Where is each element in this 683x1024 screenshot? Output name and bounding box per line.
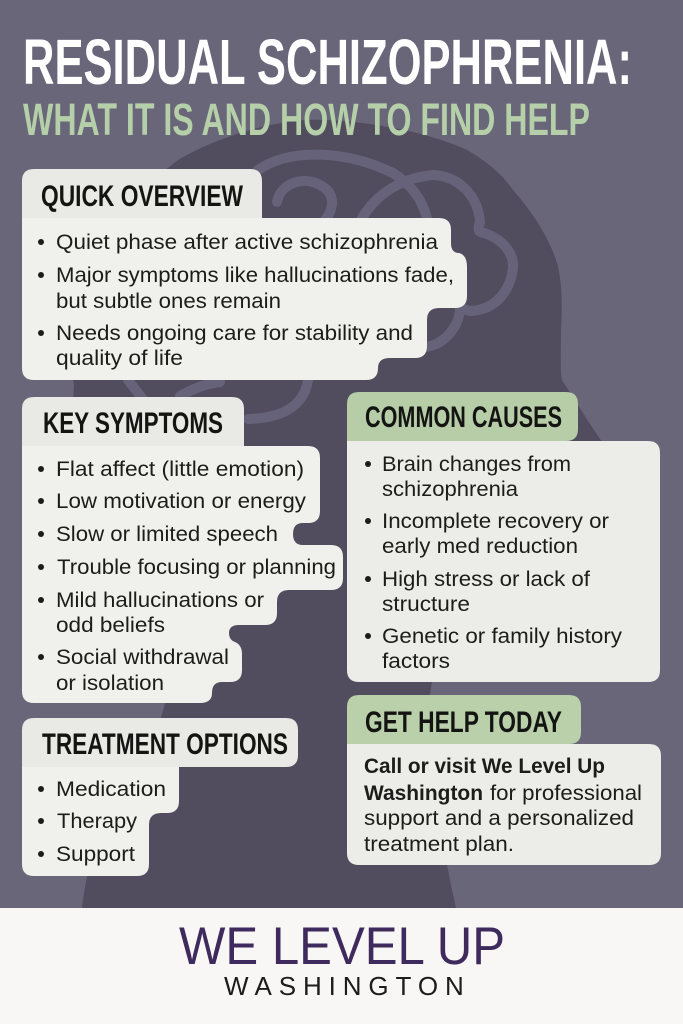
bullet list: Therapy — [57, 809, 137, 833]
panel: quick overview — [22, 169, 467, 380]
heading: KEY SYMPTOMS — [43, 407, 223, 440]
bullet list: or isolation — [56, 671, 164, 695]
bullet list: Trouble focusing or planning — [57, 555, 336, 579]
bullet list: odd beliefs — [56, 613, 165, 637]
head silhouette with brain outline — [70, 120, 640, 908]
panel body — [22, 767, 179, 876]
bullet list: factors — [382, 649, 450, 673]
heading — [22, 397, 244, 446]
heading: TREATMENT OPTIONS — [42, 728, 288, 761]
bullet list: Needs ongoing care for stability and — [56, 321, 413, 345]
heading: QUICK OVERVIEW — [41, 180, 244, 213]
logo: washington: WASHINGTON — [224, 971, 471, 1001]
bullet list: Social withdrawal — [56, 645, 229, 669]
panel: get help today — [347, 695, 661, 865]
bullet list: Mild hallucinations or — [56, 588, 264, 612]
heading — [347, 695, 581, 744]
bullet list: quality of life — [56, 346, 183, 370]
footer band with logo — [0, 908, 683, 1024]
bullet list: Flat affect (little emotion) — [56, 457, 304, 481]
bullet list: Brain changes from — [382, 452, 571, 476]
bullet list: Medication — [56, 777, 166, 801]
panel: common causes — [347, 392, 660, 682]
bullet list — [38, 457, 336, 695]
bullet list: Support — [56, 842, 135, 866]
heading — [22, 169, 262, 218]
bullet list — [365, 452, 622, 673]
panel: treatment options — [22, 718, 298, 876]
bullet list — [38, 777, 166, 866]
panel body — [347, 744, 661, 865]
call to action text: Washington — [364, 781, 483, 805]
bullet list: Slow or limited speech — [56, 522, 278, 546]
call to action text — [364, 754, 642, 856]
heading: GET HELP TODAY — [365, 706, 562, 739]
bullet list: schizophrenia — [382, 477, 518, 501]
bullet list: early med reduction — [382, 534, 578, 558]
heading: COMMON CAUSES — [365, 401, 562, 434]
bullet list: Quiet phase after active schizophrenia — [56, 230, 438, 254]
call to action text: support and a personalized — [364, 806, 634, 830]
call to action text: treatment plan. — [364, 832, 514, 856]
bullet list — [38, 230, 454, 370]
bullet list: High stress or lack of — [382, 567, 590, 591]
heading — [22, 718, 298, 767]
bullet list: Incomplete recovery or — [382, 509, 609, 533]
bullet list: Genetic or family history — [382, 624, 622, 648]
logo: we level up: WE LEVEL UP — [179, 917, 505, 976]
bullet list: structure — [382, 592, 470, 616]
call to action text: for professional — [490, 781, 642, 805]
heading — [347, 392, 578, 441]
bullet list: Major symptoms like hallucinations fade, — [56, 263, 454, 287]
call to action text: Call or visit We Level Up — [364, 754, 605, 778]
title — [23, 26, 632, 145]
bullet list: Low motivation or energy — [56, 489, 306, 513]
panel body — [22, 446, 343, 703]
bullet list: but subtle ones remain — [56, 289, 281, 313]
panel: key symptoms — [22, 397, 343, 703]
panel body — [347, 441, 660, 682]
panel body — [22, 218, 467, 380]
